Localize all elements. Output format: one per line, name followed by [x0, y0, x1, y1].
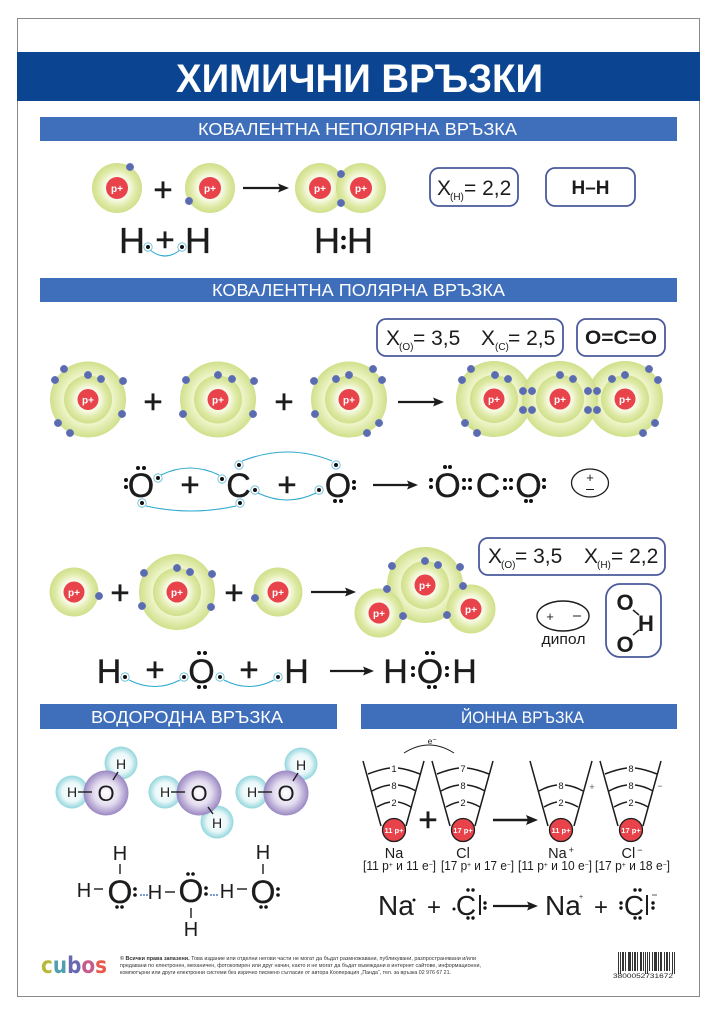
Lewis formula: hydrogen bonds between water molecules: H: [148, 882, 162, 904]
plus: +: [143, 383, 163, 420]
diagram: sodium shells: 2: [391, 798, 397, 809]
molecule: H2O: p+: [419, 581, 431, 592]
molecule: CO2: p+: [554, 395, 566, 406]
labels: particle counts: [11 p: [518, 859, 545, 873]
labels: particle counts: [11 p: [363, 859, 390, 873]
plus: +: [418, 801, 438, 838]
Lewis formula: H + O + H: H: [97, 653, 121, 691]
diagram: sodium ion shells: 8: [558, 781, 564, 792]
Lewis formula: H + H: H: [185, 220, 211, 261]
Lewis formula: Na + Cl to ions: Na: [545, 890, 581, 921]
molecule: CO2: p+: [488, 395, 500, 406]
atom: carbon: p+: [212, 396, 224, 406]
diagram: sodium shells: 8: [391, 781, 397, 792]
plus: +: [274, 383, 294, 420]
labels: particle counts: и 11 e: [393, 859, 429, 873]
diagram: sodium ion shells: 11 p+: [552, 826, 571, 835]
Lewis formula: hydrogen bonds between water molecules: O: [108, 874, 132, 910]
diagram: chlorine shells: [432, 761, 493, 842]
Lewis formula: H + O + H: [97, 651, 309, 691]
labels: particle counts: +: [544, 862, 548, 869]
molecule: water 1: H: [67, 784, 77, 800]
Lewis formula: H:O:H: H: [383, 653, 408, 691]
labels: particle counts: ]: [667, 859, 670, 873]
labels: particle counts: −: [663, 862, 667, 869]
arrow: [373, 480, 418, 490]
title banner: [17, 52, 700, 101]
Lewis formula: O::C::O: [429, 465, 546, 505]
box: O=C=O formula: O=C=O: [585, 328, 657, 349]
molecule: water 1: [56, 746, 138, 816]
atom: hydrogen right: [251, 568, 302, 616]
labels: particle counts: [363, 859, 670, 873]
molecule: CO2: p+: [619, 395, 631, 406]
box: electronegativity of O and C: (O): [399, 342, 413, 353]
molecule: water 2: H: [160, 784, 170, 800]
molecule: water 2: [148, 770, 234, 838]
Lewis formula: hydrogen bonds between water molecules: H: [220, 881, 234, 903]
atom: oxygen left: p+: [82, 396, 94, 406]
Lewis formula: Na + Cl to ions: [378, 888, 657, 921]
labels: particle counts: и 17 e: [471, 859, 507, 873]
box: electronegativity of O and H: = 3,5: [515, 545, 562, 568]
labels: atoms and ions: Cl: [622, 846, 635, 862]
atom: carbon: [179, 362, 258, 438]
atom: hydrogen 2: [185, 163, 235, 213]
molecule: H2: [295, 163, 386, 213]
arrow: [243, 184, 289, 192]
labels: particle counts: ]: [433, 859, 436, 873]
diagram: sodium shells: 11 p+: [385, 826, 404, 835]
molecule: water 3: O: [277, 781, 295, 806]
box: electronegativity of O and C: = 2,5: [508, 327, 555, 350]
heading: nonpolar covalent bond: [40, 117, 677, 141]
box: electronegativity of O and H: = 2,2: [611, 545, 658, 568]
box: H-H formula: H–H: [571, 178, 610, 199]
arrow: [493, 815, 538, 825]
diagram: chloride ion shells: 8: [628, 764, 634, 775]
Lewis formula: hydrogen bonds between water molecules: H: [113, 843, 127, 865]
Lewis formula: Na + Cl to ions: +: [427, 894, 441, 921]
Lewis formula: Na + Cl to ions: +: [579, 894, 583, 901]
box: electronegativity of O and C: = 3,5: [413, 327, 460, 350]
labels: particle counts: +: [389, 862, 393, 869]
icon: dipole with label: +: [546, 609, 554, 624]
box: water structural formula: O: [616, 590, 634, 615]
Lewis formula: Na + Cl to ions: Na: [378, 890, 414, 921]
box: water structural formula: H: [638, 611, 654, 636]
heading: ionic bond: [361, 704, 677, 729]
labels: atoms and ions: Na: [548, 846, 567, 862]
plus: +: [110, 574, 130, 611]
Lewis formula: H + H: H: [119, 220, 145, 261]
molecule: H2O: p+: [465, 605, 477, 616]
Lewis formula: H:H: H: [314, 220, 340, 261]
diagram: sodium ion shells: +: [589, 782, 595, 792]
Lewis formula: Na + Cl to ions: C: [624, 890, 644, 921]
Lewis formula: O::C::O: O: [515, 467, 542, 505]
icon: dipole with label: дипол: [542, 631, 586, 648]
heading: polar covalent bond: КОВАЛЕНТНА ПОЛЯРНА ВРЪЗКА: [212, 280, 505, 300]
diagram: chloride ion shells: 17 p+: [621, 826, 641, 835]
atom: hydrogen right: p+: [272, 588, 284, 599]
diagram: chlorine shells: 7: [460, 764, 466, 775]
labels: atoms and ions: Cl: [456, 846, 470, 862]
molecule: water 2: O: [190, 781, 208, 806]
atom: oxygen right: p+: [343, 396, 355, 406]
copyright notice: © Всички права запазени. Това издание или отделни негови части не могат да бъдат размножавани, публикувани, разпространявани и/или: [120, 955, 476, 962]
Lewis formula: O + C + O: C: [226, 467, 251, 505]
barcode: [613, 952, 675, 980]
Lewis formula: O::C::O: O: [434, 467, 461, 505]
Lewis formula: H + H: +: [155, 221, 175, 258]
Lewis formula: H:H: [314, 220, 373, 261]
atom: oxygen: [138, 554, 216, 630]
box: electronegativity of H: = 2,2: [464, 177, 511, 200]
box: water structural formula: [606, 584, 661, 657]
Lewis formula: H + O + H: H: [284, 653, 309, 691]
heading: ionic bond: ЙОННА ВРЪЗКА: [461, 708, 584, 727]
molecule: H2O: [354, 547, 496, 638]
Lewis formula: O + C + O: +: [277, 466, 297, 503]
diagram: chloride ion shells: [600, 761, 663, 842]
heading: hydrogen bond: [40, 704, 337, 729]
diagram: chloride ion shells: 2: [628, 798, 634, 809]
molecule: CO2: [456, 361, 663, 437]
diagram: chlorine shells: 8: [460, 781, 466, 792]
labels: particle counts: −: [507, 862, 511, 869]
labels: particle counts: и 10 e: [548, 859, 585, 873]
labels: particle counts: и 18 e: [626, 859, 663, 873]
copyright notice: предавани по електронен, механичен, фотокопирен или друг начин, както и не могат да бъдат въвеждани в интернет сайтове, информационни,: [120, 962, 481, 969]
labels: particle counts: −: [585, 862, 589, 869]
Lewis formula: O::C::O: C: [476, 467, 500, 505]
plus: +: [224, 574, 244, 611]
atom: oxygen: p+: [171, 588, 183, 599]
Lewis formula: hydrogen bonds between water molecules: H: [184, 919, 198, 941]
diagram: sodium shells: [363, 761, 424, 842]
box: electronegativity of O and H: (O): [501, 560, 515, 571]
Lewis formula: H + O + H: +: [145, 651, 165, 688]
heading: polar covalent bond: [40, 278, 677, 302]
diagram: chloride ion shells: 8: [628, 781, 634, 792]
Lewis formula: H:O:H: [383, 651, 477, 691]
box: electronegativity of O and C: (C): [495, 342, 509, 353]
molecule: water 1: H: [116, 756, 126, 772]
atom: hydrogen left: [50, 568, 103, 616]
diagram: CO2 formation: [50, 361, 663, 438]
icon: non-polar dipole: [572, 469, 608, 497]
box: electronegativity of O and H: (H): [597, 560, 611, 571]
title banner: ХИМИЧНИ ВРЪЗКИ: [176, 57, 543, 101]
molecule: H2: p+: [355, 184, 367, 195]
electron transfer arc: [404, 736, 454, 753]
molecule: water 2: H: [212, 815, 222, 831]
molecule: water 3: [236, 748, 318, 816]
Lewis formula: O + C + O: +: [180, 466, 200, 503]
Lewis formula: H:H: H: [347, 220, 373, 261]
copyright notice: [120, 955, 481, 976]
arrow: [311, 588, 356, 596]
Lewis formula: H:O:H: H: [452, 653, 477, 691]
labels: particle counts: +: [467, 862, 471, 869]
box: electronegativity of O and H: X: [584, 545, 598, 568]
box: electronegativity of H: [430, 168, 518, 206]
labels: particle counts: +: [622, 862, 626, 869]
box: electronegativity of O and C: [377, 319, 563, 356]
labels: atoms and ions: [385, 845, 642, 862]
Lewis formula: O + C + O: O: [325, 467, 351, 505]
logo: cubos: [41, 953, 107, 979]
diagram: chloride ion shells: −: [657, 781, 663, 791]
Lewis formula: H + O + H: O: [188, 653, 215, 691]
labels: particle counts: ]: [511, 859, 514, 873]
box: electronegativity of O and H: [479, 538, 665, 575]
box: electronegativity of H: (H): [450, 192, 464, 203]
icon: dipole with label: [537, 601, 589, 648]
diagram: hydrogen atoms form H2: [92, 163, 386, 213]
molecule: H2: p+: [314, 184, 326, 195]
plus: +: [153, 171, 173, 208]
diagram: sodium shells: 1: [391, 764, 397, 775]
diagram: sodium ion shells: 2: [558, 798, 564, 809]
atom: hydrogen 2: p+: [204, 184, 216, 195]
arrow: [330, 666, 374, 676]
Lewis formula: hydrogen bonds between water molecules: H: [77, 880, 91, 902]
atom: hydrogen left: p+: [68, 588, 80, 599]
electron transfer arc: −: [432, 737, 436, 744]
box: O=C=O formula: [577, 319, 665, 356]
copyright notice: компютърни или други електронни системи без изрично писмено съгласие от автора Кооперация „Панда“, тел. за връзка 02 976 67 21.: [120, 970, 451, 976]
Lewis formula: O + C + O: [124, 452, 356, 511]
molecule: H2O: p+: [373, 609, 385, 620]
atom: hydrogen 1: [92, 163, 142, 213]
icon: non-polar dipole: +: [586, 470, 594, 485]
labels: atoms and ions: +: [569, 845, 574, 855]
Lewis formula: Na + Cl to ions: C: [456, 890, 476, 921]
diagram: chlorine shells: 2: [460, 798, 466, 809]
labels: particle counts: [17 p: [595, 859, 623, 873]
electron transfer arc: e: [428, 736, 432, 746]
atom: oxygen left: [50, 362, 127, 438]
Lewis formula: H + O + H: +: [239, 651, 259, 688]
Lewis formula: Na + Cl to ions: +: [594, 894, 608, 921]
labels: atoms and ions: −: [637, 845, 642, 855]
labels: particle counts: ]: [589, 859, 592, 873]
Lewis formula: hydrogen bonds between water molecules: [77, 842, 280, 941]
atom: oxygen right: [310, 362, 387, 438]
Lewis formula: H + H: [119, 220, 211, 261]
diagram: H2O formation: [50, 547, 496, 638]
labels: particle counts: −: [429, 862, 433, 869]
labels: particle counts: [17 p: [441, 859, 469, 873]
Lewis formula: O + C + O: O: [128, 467, 154, 505]
molecule: water 1: O: [97, 781, 115, 806]
Lewis formula: hydrogen bonds between water molecules: O: [251, 874, 275, 910]
heading: nonpolar covalent bond: КОВАЛЕНТНА НЕПОЛЯРНА ВРЪЗКА: [198, 119, 517, 139]
molecule: water 3: H: [296, 757, 306, 773]
barcode: 3800052731672: [613, 974, 674, 980]
Lewis formula: hydrogen bonds between water molecules: H: [256, 842, 270, 864]
box: electronegativity of H: X: [437, 177, 451, 200]
molecule: water 3: H: [247, 784, 257, 800]
box: electronegativity of O and H: X: [488, 545, 502, 568]
atom: hydrogen 1: p+: [111, 184, 123, 195]
diagram: chlorine shells: 17 p+: [453, 826, 473, 835]
box: electronegativity of O and C: X: [386, 327, 400, 350]
box: electronegativity of O and C: X: [481, 327, 495, 350]
box: H-H formula: [546, 168, 635, 206]
arrow: [398, 398, 444, 406]
Lewis formula: H:O:H: O: [417, 653, 443, 691]
diagram: sodium ion shells: [530, 761, 595, 842]
box: water structural formula: O: [616, 632, 634, 657]
heading: hydrogen bond: ВОДОРОДНА ВРЪЗКА: [91, 707, 283, 727]
Lewis formula: hydrogen bonds between water molecules: O: [179, 873, 203, 909]
labels: atoms and ions: Na: [385, 846, 404, 862]
